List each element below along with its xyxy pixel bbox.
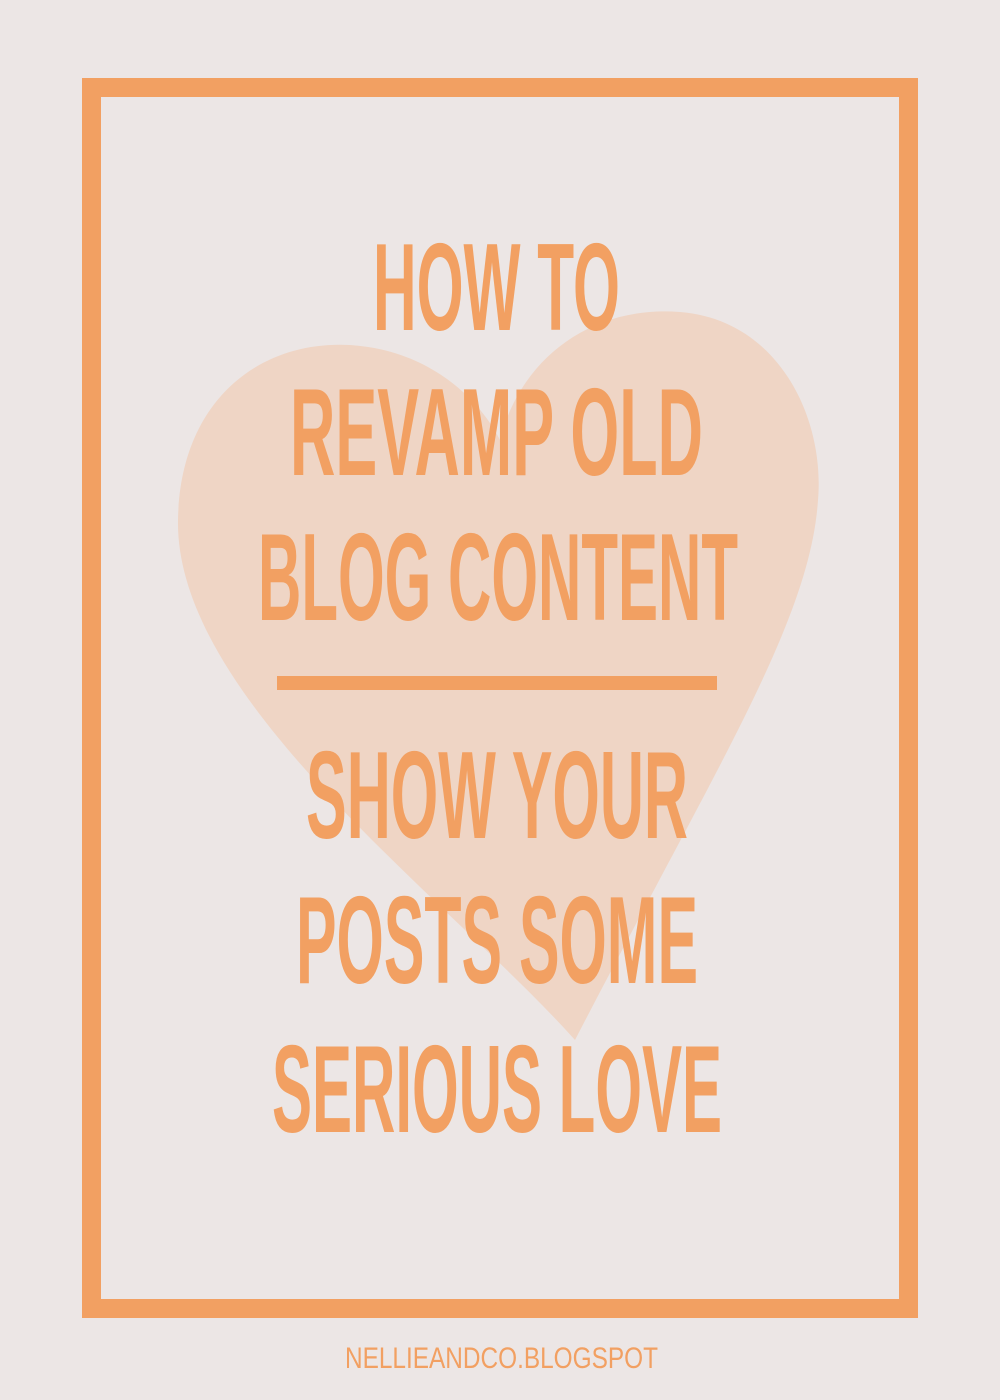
footer url: NELLIEANDCO.BLOGSPOT (345, 1342, 658, 1375)
divider rule (277, 676, 717, 690)
title: how to revamp old blog content (258, 219, 738, 647)
title: how to revamp old blog content: HOW TO (373, 219, 620, 357)
frame border (92, 88, 908, 1308)
subtitle: show your posts some serious love (272, 727, 722, 1159)
heart background (178, 311, 819, 1040)
